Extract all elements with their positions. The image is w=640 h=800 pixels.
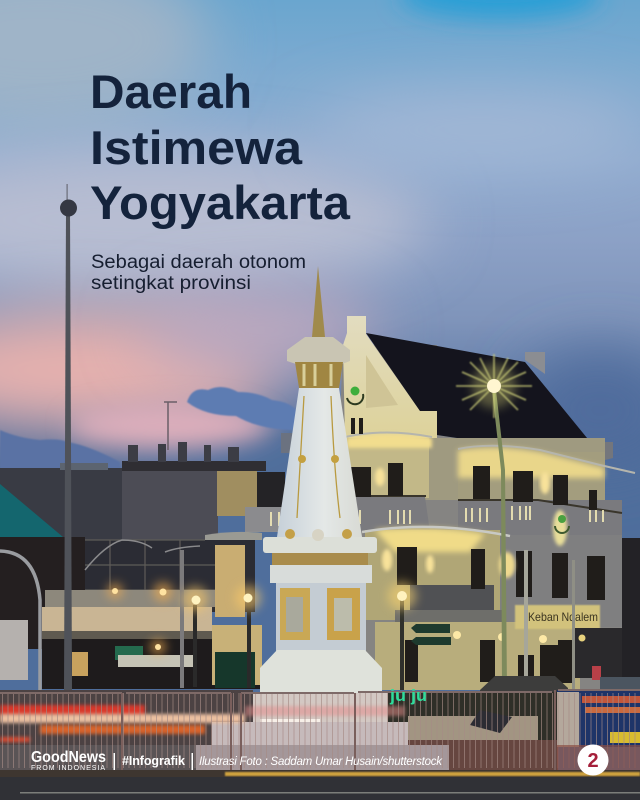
head [287,337,350,364]
clouds at the horizon [0,387,296,474]
golden spire [312,266,325,337]
left street light glows [107,582,261,655]
gold band [295,362,343,388]
GoodNews logo [31,749,106,772]
left plaque [280,588,310,640]
gable [343,316,437,440]
balcony [245,507,355,531]
shop sign: Keban Ndalem [528,610,598,624]
building walls [340,345,622,690]
top cornice [263,537,377,553]
green bowl logo [347,386,363,404]
small street poles on the right [388,550,575,690]
wall logo [555,515,569,533]
ground and light trails [0,690,558,775]
right plaque [327,588,360,640]
banner on the right [557,690,640,747]
hashtag: #Infografik [122,754,185,768]
title: Daerah [90,65,252,118]
road [0,770,640,800]
wall lights [375,468,385,486]
subtitle: setingkat provinsi [91,273,251,294]
pedestal [276,583,366,651]
left city buildings [0,402,293,689]
GoodNews logo: GoodNews [31,749,106,766]
teal roof [0,484,63,537]
roof [366,333,605,460]
left lamp poles [0,184,251,690]
page number badge [578,744,608,776]
page number badge: 2 [587,750,599,772]
Tugu Yogyakarta monument [260,266,382,693]
title: Yogyakarta [90,176,351,229]
footer credits [31,749,443,772]
barrier fence [0,690,640,772]
GoodNews logo: FROM INDONESIA [31,765,105,772]
second floor [365,530,500,620]
title: Istimewa [90,121,303,174]
main street lamp [456,354,532,690]
windows [351,418,605,683]
colonial building [245,316,640,690]
ground floor [375,622,580,690]
monument lower steps [253,693,388,748]
subtitle: Sebagai daerah otonom [91,252,306,273]
chimneys [525,352,545,374]
direction signs [411,624,451,645]
subtitle [91,252,306,294]
gold frieze [272,553,368,565]
base [260,650,382,693]
upper floor [347,438,605,500]
right dark neighbour [620,538,640,690]
obelisk body [277,388,362,537]
photo credit: Ilustrasi Foto : Saddam Umar Husain/shutterstock [199,756,443,768]
glowing balcony [42,607,212,631]
green neon sign: ju ju [389,686,427,705]
parked vehicle and street furniture [480,666,640,692]
title [90,65,351,229]
